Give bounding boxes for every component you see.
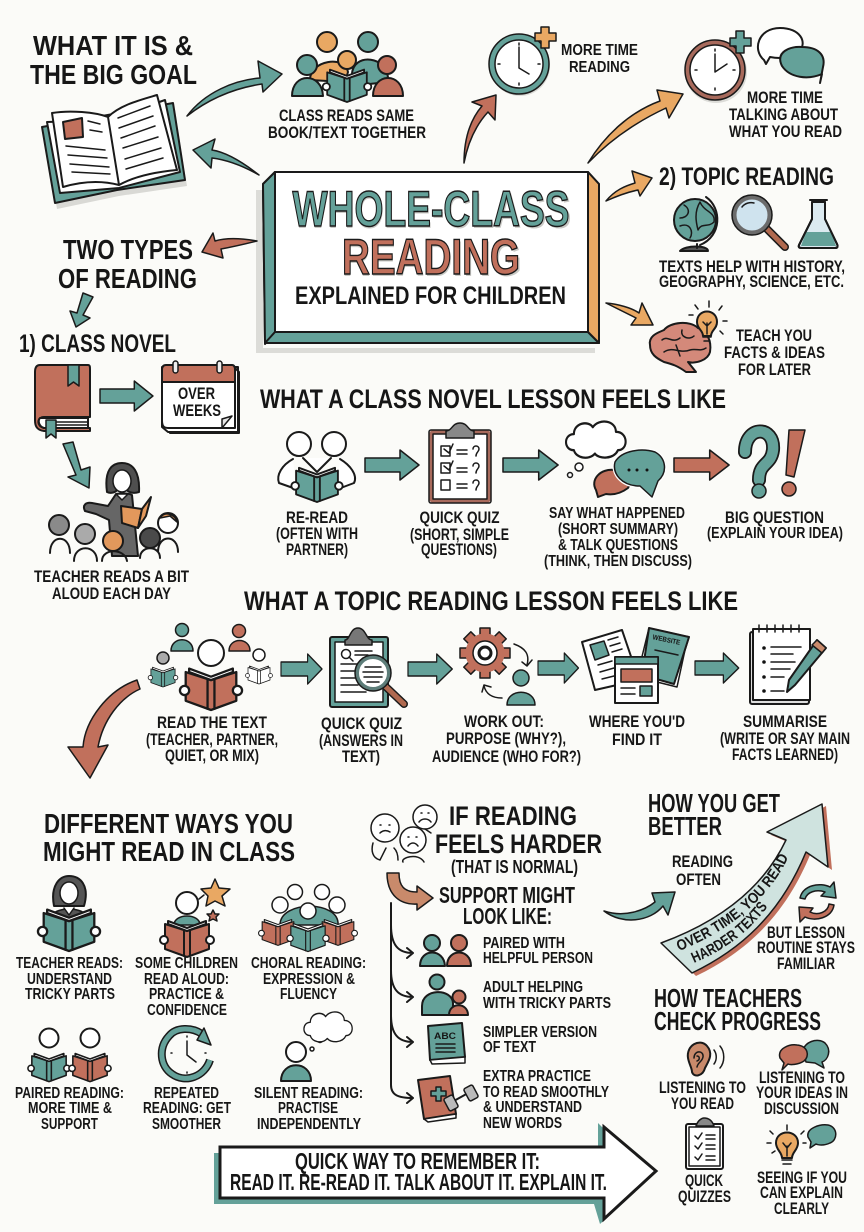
heading: class novel lesson: WHAT A CLASS NOVEL LESSON FEELS LIKE: [260, 384, 726, 414]
icon: paired reading: [28, 1028, 111, 1082]
support: simpler text: ABC: [434, 1031, 457, 1041]
icon: gear and person: [460, 628, 535, 705]
caption: quick quizzes: QUICK: [685, 1171, 723, 1190]
support: extra practice: TO READ SMOOTHLY: [483, 1084, 609, 1101]
icon: group reading: [292, 32, 403, 102]
heading: what it is: THE BIG GOAL: [30, 59, 197, 90]
heading: what it is: WHAT IT IS &: [33, 30, 193, 61]
caption: teach you facts: FACTS & IDEAS: [724, 344, 825, 362]
caption: choral reading: EXPRESSION &: [263, 971, 355, 988]
arrow to class novel: [70, 293, 93, 327]
caption: teach you facts: TEACH YOU: [736, 327, 812, 345]
caption: quick quiz answers: [319, 714, 403, 766]
icon: bulb and bubble: [767, 1125, 836, 1164]
icon: clock with speech bubbles: [685, 28, 824, 103]
caption: quick quiz: (SHORT, SIMPLE: [410, 525, 509, 544]
support: extra practice: [418, 1068, 609, 1132]
caption: class reads same text: CLASS READS SAME: [279, 106, 414, 125]
heading: how teachers check: HOW TEACHERS: [654, 983, 802, 1013]
caption: but lesson routine: FAMILIAR: [777, 954, 835, 973]
caption: teacher reads aloud: ALOUD EACH DAY: [52, 584, 172, 603]
icon: choral reading group: [259, 884, 357, 952]
icon: magnifying glass: [732, 195, 785, 247]
heading: support: SUPPORT MIGHT: [439, 882, 575, 908]
icon: flask: [799, 200, 838, 248]
main title: WHOLE-CLASS: [292, 183, 572, 239]
icon: clock plus: [489, 27, 556, 96]
support: adult: ADULT HELPING: [483, 979, 583, 996]
section: topic reading: [606, 163, 845, 379]
main title: READING: [342, 231, 522, 287]
caption: paired reading: SUPPORT: [41, 1116, 98, 1133]
heading: class novel: 1) CLASS NOVEL: [19, 330, 176, 358]
caption: listening to you read: YOU READ: [671, 1095, 734, 1113]
arrow to support list: [387, 873, 433, 910]
caption: teacher reads: UNDERSTAND: [27, 971, 112, 988]
icon: globe: [674, 197, 717, 251]
caption: say what happened: SAY WHAT HAPPENED: [549, 505, 685, 522]
caption: more time talking: [729, 88, 842, 141]
caption: more time reading: [561, 42, 638, 76]
icon: teacher reading aloud to children: [49, 463, 178, 561]
section: how you get better: [603, 788, 855, 976]
caption: choral reading: [251, 955, 366, 1003]
caption: choral reading: CHORAL READING:: [251, 955, 366, 972]
caption: where you'd find it: WHERE YOU'D: [589, 712, 685, 731]
caption: quick quizzes: QUIZZES: [678, 1187, 731, 1206]
support: extra practice: & UNDERSTAND: [483, 1099, 582, 1116]
caption: more time reading: MORE TIME: [561, 42, 638, 59]
arrow: [408, 654, 452, 684]
icon: repeat clock: [162, 1028, 211, 1078]
caption: read the text: QUIET, OR MIX): [165, 746, 259, 765]
icon: calendar over weeks: OVER: [178, 384, 215, 403]
caption: silent reading: SILENT READING:: [254, 1085, 363, 1102]
support: paired: [420, 935, 593, 967]
caption: paired reading: MORE TIME &: [28, 1100, 112, 1117]
main title: [292, 181, 572, 287]
caption: choral reading: FLUENCY: [280, 986, 337, 1003]
heading: different ways: DIFFERENT WAYS YOU: [44, 808, 293, 839]
big red arrow down: [68, 680, 140, 778]
heading: what it is: [30, 30, 197, 90]
caption: say what happened: (SHORT SUMMARY): [558, 521, 678, 538]
caption: teach you facts: FOR LATER: [738, 361, 811, 379]
heading: topic reading lesson: WHAT A TOPIC READING LESSON FEELS LIKE: [244, 586, 738, 616]
icon: open book: [42, 95, 187, 209]
caption: re-read: PARTNER): [286, 540, 348, 559]
caption: more time talking: MORE TIME: [747, 88, 823, 107]
caption: work out: AUDIENCE (WHO FOR?): [432, 747, 581, 766]
support: simpler text: OF TEXT: [483, 1039, 536, 1056]
caption: quick quiz: [410, 508, 509, 559]
caption: seeing if you can explain: [757, 1168, 847, 1218]
main title: WHOLE-CLASS: [292, 181, 570, 237]
caption: where you'd find it: FIND IT: [612, 730, 663, 749]
icon: newspaper, book and website: WEBSITE: [652, 634, 681, 647]
caption: silent reading: PRACTISE: [278, 1100, 338, 1117]
heading: how teachers check: [654, 983, 821, 1036]
arrow: [503, 450, 558, 480]
heading: if reading feels harder: (THAT IS NORMAL): [451, 857, 578, 877]
icon: closed book: [35, 365, 90, 438]
caption: quick quiz answers: TEXT): [342, 747, 380, 766]
caption: listening to you read: LISTENING TO: [659, 1079, 746, 1097]
caption: listening to you read: [659, 1079, 746, 1113]
caption: texts help: [659, 257, 845, 291]
caption: read the text: READ THE TEXT: [157, 713, 268, 732]
caption: some children read aloud: SOME CHILDREN: [135, 955, 238, 972]
heading: if reading feels harder: [435, 801, 602, 877]
caption: teacher reads: [16, 955, 123, 1003]
caption: more time reading: READING: [569, 59, 630, 76]
caption: repeated reading: [143, 1085, 231, 1133]
caption: work out: WORK OUT:: [464, 712, 544, 731]
section: different ways to read: [15, 808, 366, 1133]
icon: calendar over weeks: [162, 361, 239, 433]
heading: two types: TWO TYPES: [63, 234, 193, 265]
heading: how you get better: BETTER: [648, 811, 722, 841]
caption: read the text: [146, 713, 278, 765]
caption: class reads same text: [268, 106, 426, 142]
support: paired: HELPFUL PERSON: [483, 950, 593, 967]
caption: read the text: (TEACHER, PARTNER,: [146, 730, 278, 749]
heading: different ways: MIGHT READ IN CLASS: [43, 836, 295, 867]
caption: paired reading: PAIRED READING:: [15, 1085, 124, 1102]
support: simpler text: SIMPLER VERSION: [483, 1024, 597, 1041]
caption: big question: BIG QUESTION: [725, 508, 824, 527]
section: if reading feels harder: [371, 801, 611, 1132]
support: extra practice: NEW WORDS: [483, 1115, 562, 1132]
caption: some children read aloud: [135, 955, 238, 1019]
arrow to brain: [606, 303, 653, 325]
subtitle: EXPLAINED FOR CHILDREN: [295, 282, 566, 310]
caption: teacher reads: TRICKY PARTS: [25, 986, 115, 1003]
section: two types and class novel: [19, 233, 257, 603]
caption: repeated reading: SMOOTHER: [152, 1116, 221, 1133]
icon: worried faces: [371, 805, 437, 862]
caption: reading often: [672, 852, 733, 889]
icon: discussion bubbles: [780, 1040, 829, 1070]
caption: silent reading: INDEPENDENTLY: [257, 1116, 361, 1133]
caption: where you'd find it: [589, 712, 685, 749]
caption: work out: PURPOSE (WHY?),: [446, 729, 566, 748]
caption: listening to ideas: [756, 1069, 848, 1118]
caption: paired reading: [15, 1085, 124, 1133]
caption: teacher reads aloud: TEACHER READS A BIT: [34, 567, 189, 586]
main title: READING: [342, 229, 520, 285]
support: paired: PAIRED WITH: [483, 935, 565, 952]
caption: summarise: [720, 712, 850, 764]
arrow to two types: [202, 233, 257, 258]
caption: quick quiz: QUICK QUIZ: [420, 508, 500, 527]
caption: teach you facts: [724, 327, 825, 379]
caption: some children read aloud: READ ALOUD:: [144, 971, 229, 988]
arrow: [674, 450, 729, 480]
section: how teachers check progress: [654, 983, 848, 1218]
arrow: [695, 653, 739, 683]
caption: quick quiz answers: (ANSWERS IN: [319, 731, 403, 750]
caption: work out: [432, 712, 581, 766]
big rising arrow: HARDER TEXTS: [690, 902, 766, 963]
caption: quick quiz: QUESTIONS): [421, 540, 497, 559]
icon: brain and bulb: [650, 301, 727, 372]
icon: child reads aloud: [160, 879, 230, 957]
support: adult: [422, 974, 611, 1015]
arrow to talking clock: [588, 90, 683, 163]
icon: clipboard with magnifier: [330, 628, 404, 707]
heading: if reading feels harder: IF READING: [449, 801, 577, 831]
icon: cycle arrows: [799, 882, 836, 922]
heading: support: LOOK LIKE:: [463, 903, 552, 929]
arrow to teacher: [63, 442, 90, 488]
caption: say what happened: (THINK, THEN DISCUSS): [544, 553, 692, 570]
caption: re-read: (OFTEN WITH: [276, 524, 358, 543]
caption: listening to ideas: DISCUSSION: [764, 1100, 839, 1118]
caption: repeated reading: READING: GET: [143, 1100, 231, 1117]
heading: support: [439, 882, 575, 929]
heading: different ways: [43, 808, 295, 867]
branching line: [391, 903, 413, 1103]
arrow to calendar: [100, 381, 153, 411]
caption: more time talking: TALKING ABOUT: [729, 105, 838, 124]
heading: two types: [58, 234, 197, 294]
caption: seeing if you can explain: CLEARLY: [774, 1199, 829, 1218]
caption: silent reading: [254, 1085, 363, 1133]
caption: teacher reads aloud: [34, 567, 189, 603]
support: adult: WITH TRICKY PARTS: [483, 995, 611, 1012]
heading: how you get better: HOW YOU GET: [648, 788, 780, 818]
caption: reading often: READING: [672, 852, 733, 871]
banner arrow: quick way to remember: READ IT. RE-READ IT. TALK ABOUT IT. EXPLAIN IT.: [230, 1169, 607, 1195]
icon: quiz clipboard: [429, 423, 491, 503]
caption: quick quizzes: [678, 1171, 731, 1206]
arrow to topic reading: [606, 171, 652, 201]
caption: quick quiz answers: QUICK QUIZ: [321, 714, 402, 733]
caption: reading often: OFTEN: [676, 870, 721, 889]
heading: how you get better: [648, 788, 780, 841]
caption: summarise: SUMMARISE: [743, 712, 827, 731]
icon: ear: [688, 1043, 724, 1075]
arrow: [538, 653, 578, 683]
icon: silent reading: [281, 1012, 352, 1081]
caption: re-read: [276, 508, 358, 559]
icon: quiz clipboard: [686, 1118, 723, 1169]
caption: big question: [707, 508, 843, 542]
section: what it is and the big goal: [30, 30, 426, 209]
heading: if reading feels harder: FEELS HARDER: [435, 829, 602, 859]
icon: read the text group: [148, 624, 272, 710]
caption: some children read aloud: CONFIDENCE: [147, 1002, 227, 1019]
arrow back to book: [193, 139, 259, 175]
icon: newspaper, book and website: [582, 628, 689, 703]
arrow up to clock: [464, 95, 496, 163]
icon: thought and speech bubbles: [566, 422, 664, 497]
heading: two types: OF READING: [58, 263, 197, 294]
title panel: [256, 172, 599, 353]
support: extra practice: EXTRA PRACTICE: [483, 1068, 591, 1085]
caption: but lesson routine: [757, 923, 855, 973]
section: more time reading: [464, 27, 842, 201]
support: simpler text: [428, 1023, 597, 1064]
big rising arrow: OVER TIME, YOU READ: [676, 854, 787, 950]
caption: say what happened: & TALK QUESTIONS: [558, 537, 678, 554]
icon: notebook and pencil: [750, 625, 826, 704]
step: re-read: [278, 432, 355, 502]
caption: teacher reads: TEACHER READS:: [16, 955, 123, 972]
caption: say what happened: [544, 505, 692, 570]
section: class novel lesson: [260, 384, 843, 570]
banner arrow: quick way to remember: [214, 1123, 656, 1224]
arrow to class group: [187, 61, 282, 116]
caption: repeated reading: REPEATED: [154, 1085, 219, 1102]
arrow: [281, 654, 322, 684]
icon: question and exclamation marks: [745, 430, 805, 498]
section: topic reading lesson: [68, 586, 850, 778]
caption: some children read aloud: PRACTICE &: [149, 986, 224, 1003]
banner arrow: quick way to remember: QUICK WAY TO REMEMBER IT:: [295, 1148, 540, 1174]
arrow: [365, 450, 419, 480]
icon: teacher reads: [38, 876, 100, 951]
icon: calendar over weeks: WEEKS: [173, 401, 221, 420]
big rising arrow: [660, 803, 832, 976]
caption: class reads same text: BOOK/TEXT TOGETHER: [268, 123, 426, 142]
arrow to big arrow: [604, 892, 675, 920]
caption: re-read: RE-READ: [286, 508, 348, 527]
